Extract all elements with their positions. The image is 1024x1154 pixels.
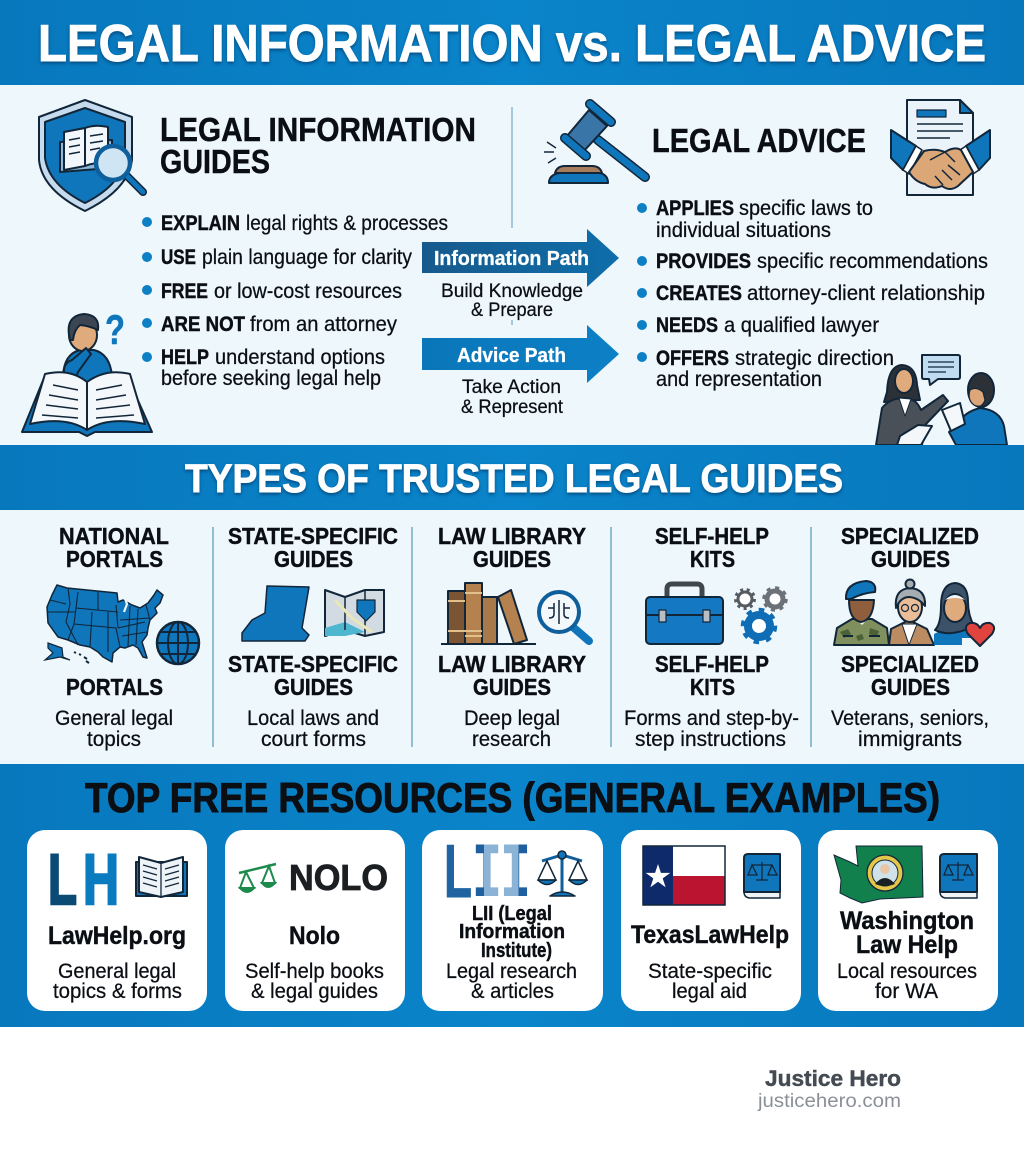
bullet list: legal information: EXPLAIN [161,212,240,235]
logo: LH: H [83,841,119,920]
text: build knowledge and prepare: Build Knowledge [441,281,583,302]
column dividers [213,527,811,747]
card: nolo [225,830,405,1011]
heading: state-specific guides [228,523,398,572]
text: general legal topics: General legal [55,707,173,730]
bullet list: legal information: understand options [215,346,385,369]
logo: LII: I [500,832,531,920]
heading: self-help kits: KITS [690,546,735,572]
text: legal research and articles: & articles [471,980,554,1003]
text: self-help books and legal guides [245,960,384,1003]
heading: specialized guides: GUIDES [871,546,950,572]
text: local laws and court forms [247,707,379,751]
bullet list: legal advice: NEEDS [656,314,718,337]
text: state-specific legal aid [648,960,772,1003]
card: washington law help [818,830,998,1011]
text: general legal topics: topics [87,728,141,751]
text: state-specific legal aid: State-specific [648,960,772,983]
heading: state-specific guides: STATE-SPECIFIC [228,523,398,549]
bullet list: legal information: HELP [161,346,209,369]
arrow: advice path [422,325,619,383]
text: veterans, seniors, immigrants [831,707,989,751]
bullet list: legal information: or low-cost resources [214,280,402,303]
label: state-specific guides [228,651,398,700]
bullet list: legal advice: a qualified lawyer [724,314,879,337]
card: texaslawhelp [621,830,801,1011]
panel: specialized guides [831,523,994,751]
logo: LII [444,829,531,920]
panel: legal information guides [22,100,476,436]
arrow: information path: Information Path [434,248,589,270]
name: nolo: Nolo [289,922,340,950]
arrow: information path [422,229,619,287]
text: build knowledge and prepare: & Prepare [471,300,553,321]
panel: state-specific guides [228,523,398,751]
logo: LH: L [48,841,77,920]
bullet list: legal advice: OFFERS [656,347,729,370]
heading: legal information guides: LEGAL INFORMATION [160,112,476,149]
bullet list: legal information: FREE [161,280,208,303]
footer credit: justicehero.com [757,1091,901,1112]
center divider [511,107,513,325]
title band [0,0,1024,85]
name: LII (Legal Information Institute) [459,903,565,962]
label: portals: PORTALS [66,674,163,700]
heading: law library guides: LAW LIBRARY [438,523,586,549]
bullet list: legal advice [637,197,988,391]
icon: shield with book and magnifier [39,100,143,211]
text: general legal topics and forms [53,960,182,1003]
label: self-help kits: KITS [690,674,735,700]
section band: types of trusted legal guides: TYPES OF TRUSTED LEGAL GUIDES [185,457,843,501]
icon: washington state map with seal [834,846,923,903]
section band: types of trusted legal guides [0,445,1024,510]
icon: veteran, senior, and immigrant figures with heart [834,580,994,646]
footer credit: Justice Hero [765,1066,901,1091]
panel: law library guides [438,523,589,751]
heading: legal information guides: GUIDES [160,144,270,181]
name: washington law help: Washington [840,907,974,935]
bullet list: legal advice: CREATES [656,282,742,305]
text: local resources for WA: Local resources [837,960,977,983]
text: forms and step-by-step instructions: step instructions [635,728,786,751]
name: LII (Legal Information Institute): Information [459,921,565,943]
icon: books and magnifier [441,583,589,644]
heading: national portals: PORTALS [66,546,163,572]
icon: open book [136,857,187,897]
icon: handshake over document [891,100,990,195]
text: local resources for WA: for WA [875,980,938,1003]
heading: legal advice: LEGAL ADVICE [652,123,866,160]
label: law library guides: LAW LIBRARY [438,651,586,677]
text: local laws and court forms: court forms [261,728,366,751]
icon: state shape and folded map [242,586,384,641]
footer credit [757,1066,901,1112]
label: self-help kits: SELF-HELP [655,651,769,677]
text: local laws and court forms: Local laws and [247,707,379,730]
icon: law book [940,854,977,898]
logo: NOLO: NOLO [289,857,388,898]
heading: specialized guides [841,523,979,572]
heading: specialized guides: SPECIALIZED [841,523,979,549]
text: deep legal research [464,707,560,751]
text: deep legal research: Deep legal [464,707,560,730]
heading: law library guides: GUIDES [473,546,551,572]
text: legal research and articles [446,960,577,1003]
bullet list: legal information [142,212,448,390]
name: lawhelp.org: LawHelp.org [48,922,186,950]
text: take action and represent: Take Action [462,377,561,398]
icon: gavel [544,104,645,183]
bullet list: legal advice: APPLIES [656,197,734,220]
label: specialized guides: GUIDES [871,674,950,700]
bullet list: legal advice: attorney-client relationship [747,282,985,305]
label: specialized guides: SPECIALIZED [841,651,979,677]
bullet list: legal information: from an attorney [250,313,397,336]
text: forms and step-by-step instructions [624,707,799,751]
text: take action and represent [461,377,564,418]
card: LII [422,829,603,1011]
name: LII (Legal Information Institute): LII (Legal [472,903,552,925]
label: law library guides [438,651,586,700]
label: state-specific guides: STATE-SPECIFIC [228,651,398,677]
text: build knowledge and prepare [441,281,583,321]
icon: toolbox and gears [646,584,786,644]
name: washington law help [840,907,974,959]
heading: national portals [59,523,169,572]
label: state-specific guides: GUIDES [274,674,353,700]
text: self-help books and legal guides: & legal guides [251,980,378,1003]
icon: person reading a book: ? [105,306,125,353]
logo: LH [48,841,119,920]
bullet list: legal advice: and representation [656,368,822,391]
panel: national portals [45,523,199,751]
bullet list: legal advice: strategic direction [735,347,894,370]
name: texaslawhelp: TexasLawHelp [631,921,789,949]
text: legal research and articles: Legal research [446,960,577,983]
bullet list: legal advice: specific recommendations [757,250,988,273]
icon: texas flag [643,846,725,905]
heading: legal information guides [160,112,476,181]
heading: self-help kits: SELF-HELP [655,523,769,549]
heading: national portals: NATIONAL [59,523,169,549]
text: take action and represent: & Represent [461,397,564,418]
text: forms and step-by-step instructions: Forms and step-by- [624,707,799,730]
name: washington law help: Law Help [856,931,958,959]
panel: legal advice [544,100,1007,445]
text: general legal topics and forms: topics & forms [53,980,182,1003]
label: law library guides: GUIDES [473,674,551,700]
logo: LII: I [472,832,502,920]
logo: scales [239,864,276,892]
text: general legal topics and forms: General legal [58,960,176,983]
label: self-help kits [655,651,769,700]
icon: person reading a book [22,306,152,436]
text: self-help books and legal guides: Self-help books [245,960,384,983]
bullet list: legal information: plain language for clarity [202,246,412,269]
bullet list: legal information: before seeking legal help [161,367,381,390]
icon: scales of justice [538,851,587,896]
text: veterans, seniors, immigrants: Veterans, seniors, [831,707,989,730]
heading: state-specific guides: GUIDES [274,546,353,572]
name: LII (Legal Information Institute): Institute) [481,940,552,962]
bullet list: legal advice: individual situations [656,219,831,242]
text: state-specific legal aid: legal aid [672,980,747,1003]
text: deep legal research: research [472,728,551,751]
text: veterans, seniors, immigrants: immigrants [858,728,962,751]
text: general legal topics [55,707,173,751]
bullet list: legal advice: PROVIDES [656,250,751,273]
bullet list: legal information: ARE NOT [161,313,245,336]
bullet list: legal advice: specific laws to [739,197,873,220]
heading: self-help kits [655,523,769,572]
logo: LII: L [444,829,472,913]
text: local resources for WA [837,960,977,1003]
bullet list: legal information: USE [161,246,196,269]
icon: law book [744,854,780,898]
panel: self-help kits [624,523,799,751]
bullet list: legal information: legal rights & processes [246,212,448,235]
arrow: advice path: Advice Path [457,345,566,367]
icon: US map with globe [45,585,199,664]
card: lawhelp.org [27,830,207,1011]
label: specialized guides [841,651,979,700]
icon: lawyer talking to client [876,355,1007,445]
heading: law library guides [438,523,586,572]
